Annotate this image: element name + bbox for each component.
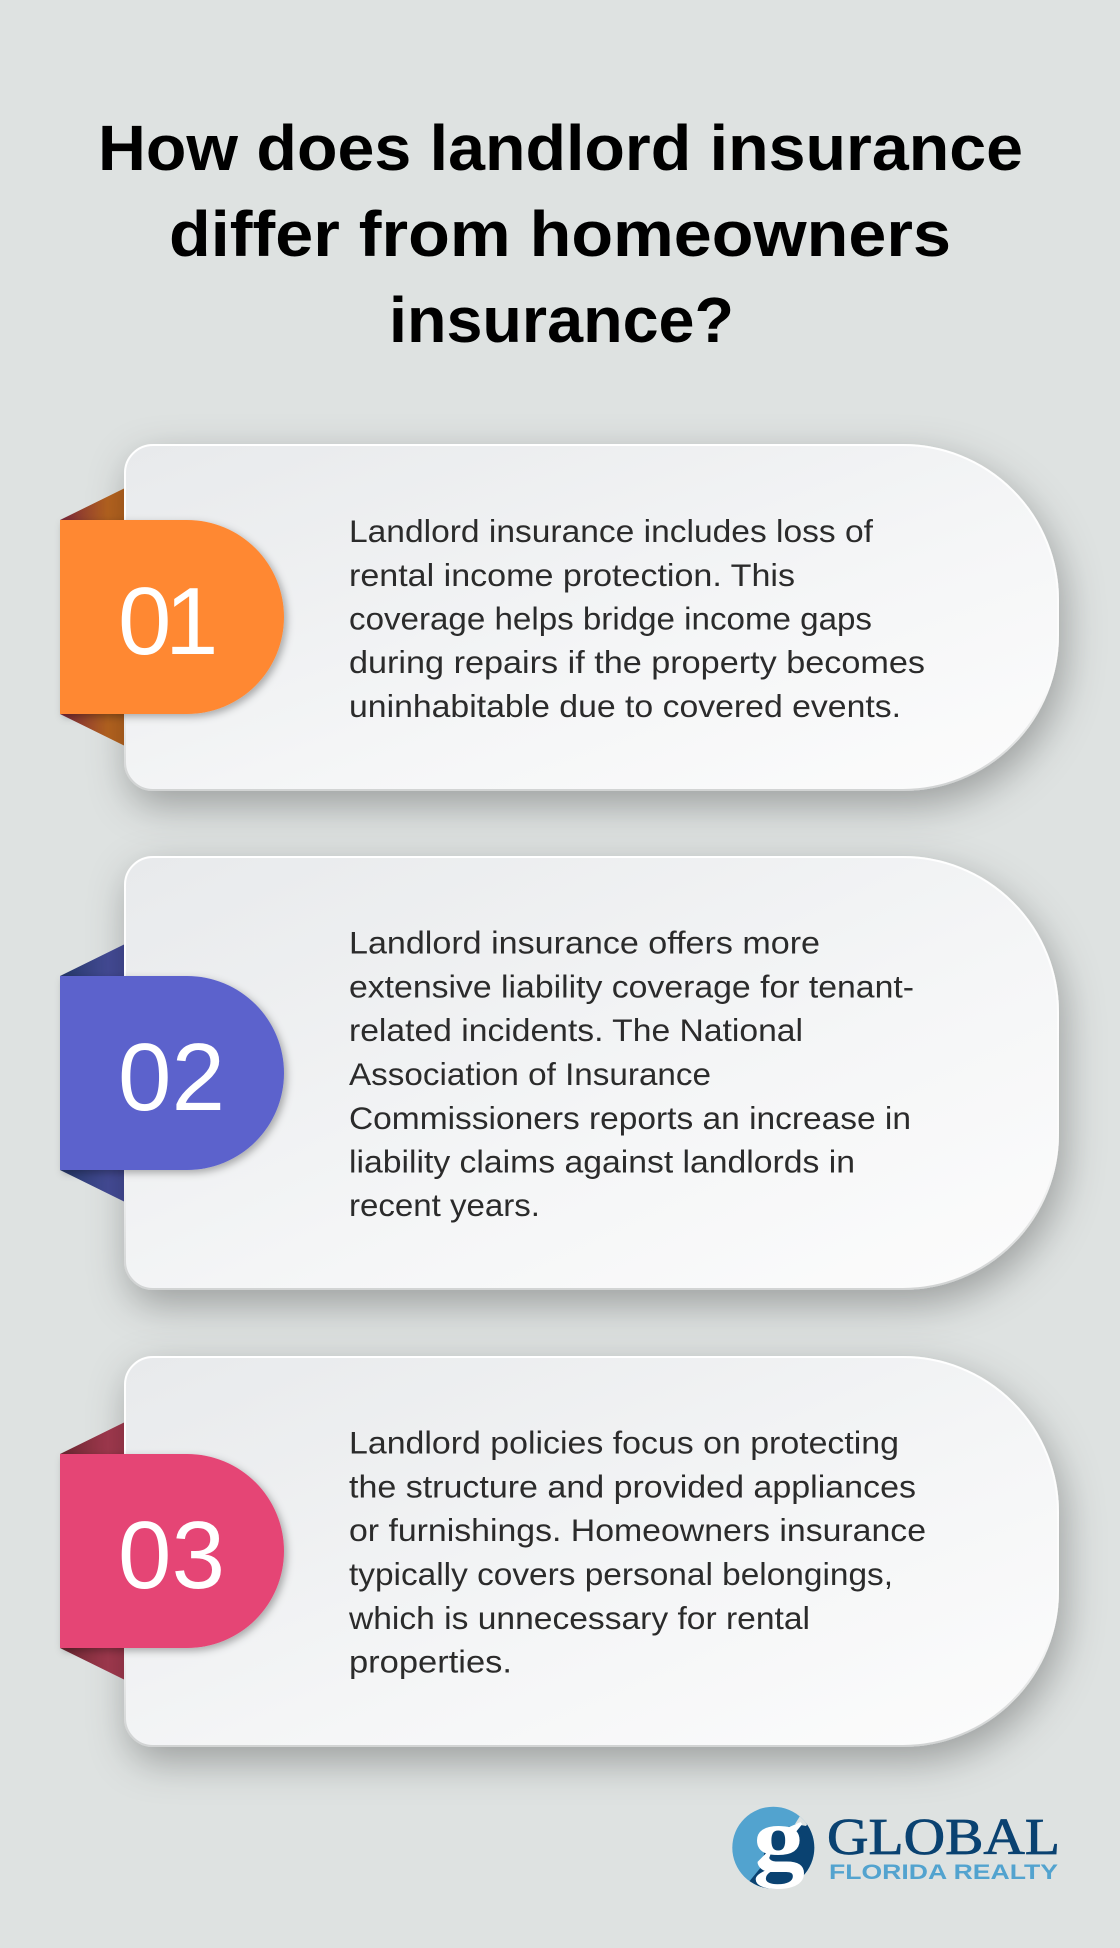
badge: 02 — [60, 976, 284, 1170]
title: differ from homeowners — [169, 198, 951, 270]
text: step 01: rental income protection. This — [349, 557, 795, 593]
wordmark: GLOBAL — [827, 1809, 1060, 1866]
text: step 01: during repairs if the property becomes — [349, 644, 925, 680]
text: step 02: Association of Insurance — [349, 1056, 711, 1092]
text: step 03: properties. — [349, 1644, 512, 1680]
badge: 01: 01 — [118, 568, 218, 675]
text: step 02: related incidents. The National — [349, 1012, 803, 1048]
ribbon fold: step 01 — [60, 488, 125, 746]
text: step 01: coverage helps bridge income gaps — [349, 600, 872, 636]
text: step 02: Commissioners reports an increase in — [349, 1100, 911, 1136]
title — [98, 112, 1023, 356]
panel: step 03 — [60, 1357, 1058, 1746]
badge: 03: 03 — [118, 1502, 225, 1609]
card: step 03 — [125, 1357, 1058, 1746]
text: step 02: extensive liability coverage for tenant- — [349, 968, 914, 1004]
text: step 01 — [349, 513, 925, 724]
panel: step 01 — [60, 445, 1058, 790]
card: step 02 — [125, 857, 1058, 1289]
text: step 01: Landlord insurance includes loss of — [349, 513, 873, 549]
text: step 02 — [349, 924, 914, 1223]
badge: 01 — [60, 520, 284, 714]
text: step 03 — [348, 1424, 926, 1680]
badge: 02: 02 — [118, 1024, 225, 1131]
icon: g roundel: g — [753, 1788, 805, 1889]
title: How does landlord insurance — [98, 112, 1023, 184]
logo: Global Florida Realty — [732, 1806, 1058, 1889]
ribbon fold: step 03 — [60, 1422, 125, 1680]
title: insurance? — [389, 284, 734, 356]
text: step 01: uninhabitable due to covered events. — [349, 688, 901, 724]
text: step 02: recent years. — [349, 1187, 540, 1223]
tagline: FLORIDA REALTY — [829, 1861, 1058, 1884]
text: step 03: or furnishings. Homeowners insurance — [349, 1512, 926, 1548]
text: step 03: the structure and provided appliances — [349, 1468, 916, 1504]
icon: g roundel — [732, 1806, 814, 1889]
ribbon fold: step 02 — [60, 944, 125, 1202]
badge: 03 — [60, 1454, 284, 1648]
text: step 03: which is unnecessary for rental — [348, 1600, 810, 1636]
text: step 02: liability claims against landlords in — [349, 1144, 855, 1180]
text: step 02: Landlord insurance offers more — [349, 924, 820, 960]
card: step 01 — [125, 445, 1058, 790]
panel: step 02 — [60, 857, 1058, 1289]
text: step 03: typically covers personal belongings, — [349, 1556, 893, 1592]
text: step 03: Landlord policies focus on protecting — [349, 1424, 899, 1460]
